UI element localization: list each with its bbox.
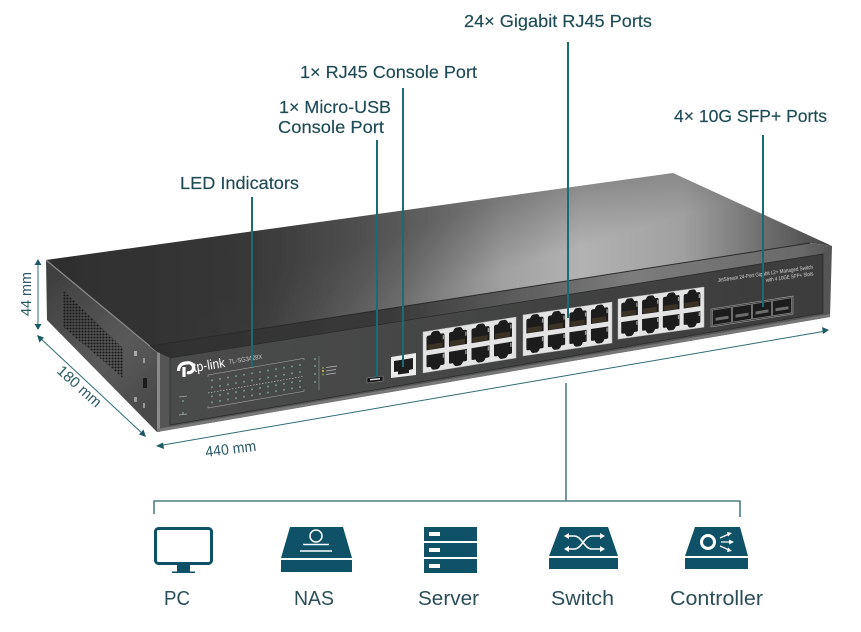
dimension: width 440 mm: 440 mm <box>204 438 257 461</box>
label: SFP+ ports: 4× 10G SFP+ Ports <box>674 106 827 126</box>
model name: TL-SG3428X <box>228 354 263 366</box>
icon: Server <box>424 527 477 573</box>
dimension: width 440 mm <box>156 327 829 461</box>
label: NAS: NAS <box>294 587 334 610</box>
label: micro-USB console: 1× Micro-USB <box>279 97 391 117</box>
dimension: depth 180 mm: 180 mm <box>53 362 105 411</box>
dimension: depth 180 mm <box>37 335 146 437</box>
label: PC: PC <box>164 587 190 610</box>
callout line: LED indicators <box>251 197 253 367</box>
label: micro-USB console <box>278 97 391 137</box>
connection bracket <box>154 383 740 517</box>
SFP+ cages <box>711 296 793 327</box>
label: Server: Server <box>418 587 479 610</box>
label: RJ45 console: 1× RJ45 Console Port <box>300 62 477 82</box>
console RJ45 port <box>391 353 416 378</box>
switch device <box>46 173 832 432</box>
SFP and status LEDs <box>179 356 337 415</box>
tp-link logo: tp-link <box>192 355 226 375</box>
switch front panel <box>150 243 832 432</box>
label: micro-USB console: Console Port <box>278 117 384 137</box>
switch side panel <box>46 260 157 432</box>
switch top cover <box>46 173 832 346</box>
LED indicator grid <box>208 358 304 408</box>
label: gigabit ports: 24× Gigabit RJ45 Ports <box>464 11 652 31</box>
callout line: RJ45 console <box>402 88 404 367</box>
RJ45 port block 3 <box>618 287 704 339</box>
side vent <box>63 290 123 378</box>
tp-link logo <box>178 355 226 377</box>
icon: Switch <box>549 527 618 569</box>
dimension: height 44 mm: 44 mm <box>18 272 35 316</box>
RJ45 port block 2 <box>523 302 612 356</box>
product description: with 4 10GE SFP+ Slots <box>765 271 814 284</box>
icon: NAS <box>281 527 352 572</box>
label: Switch: Switch <box>551 587 614 610</box>
callout line: gigabit ports <box>567 42 569 318</box>
icon: Controller <box>685 527 748 569</box>
label: Controller: Controller <box>670 587 763 610</box>
callout line: micro-USB <box>376 140 378 377</box>
dimension: height 44 mm <box>18 259 42 330</box>
product description: JetStream 24-Port Gigabit L2+ Managed Switch <box>717 265 813 284</box>
RJ45 port block 1 <box>423 317 516 373</box>
icon: PC <box>156 528 212 573</box>
micro-USB port <box>367 376 383 383</box>
label: LED indicators: LED Indicators <box>180 173 299 193</box>
callout line: SFP+ ports <box>762 135 764 307</box>
